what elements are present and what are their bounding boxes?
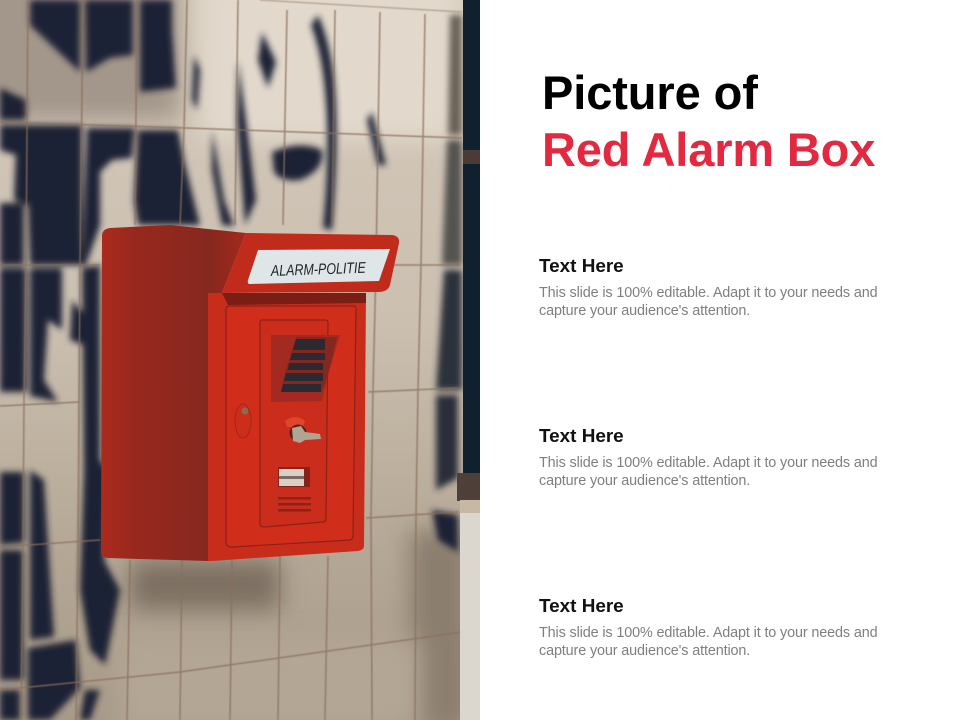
text block 3 (539, 596, 877, 658)
title line 2: Red Alarm Box (542, 123, 875, 176)
graffiti (0, 0, 386, 720)
vent hood (271, 335, 340, 402)
text block 3: Text Here (539, 596, 624, 617)
photo: red alarm box on graffiti tile wall (0, 0, 480, 720)
lower slots (278, 497, 311, 512)
alarm box (101, 225, 399, 561)
label plate (248, 249, 390, 284)
door (226, 306, 356, 547)
text block 1: This slide is 100% editable. Adapt it to your needs and (539, 284, 877, 300)
title line 1: Picture of (542, 66, 758, 119)
title (542, 66, 875, 176)
latch (235, 404, 251, 438)
box front (208, 293, 366, 561)
hood (222, 233, 399, 293)
label text: ALARM-POLITIE (270, 260, 367, 280)
text block 3: capture your audience's attention. (539, 642, 750, 658)
handle (285, 417, 321, 443)
graffiti right edge (432, 15, 462, 552)
text block 3: This slide is 100% editable. Adapt it to your needs and (539, 624, 877, 640)
text block 1: capture your audience's attention. (539, 302, 750, 318)
text block 2 (539, 426, 877, 488)
text block 2: This slide is 100% editable. Adapt it to your needs and (539, 454, 877, 470)
shadow below hood (222, 293, 366, 305)
box side (101, 225, 246, 561)
tile grout lines (0, 0, 462, 720)
text block 1 (539, 256, 877, 318)
text block 2: Text Here (539, 426, 624, 447)
text block 2: capture your audience's attention. (539, 472, 750, 488)
indicator window (278, 467, 310, 487)
wall background (0, 0, 480, 720)
text block 1: Text Here (539, 256, 624, 277)
dark right strip (457, 0, 480, 720)
inner panel (260, 320, 328, 527)
vent slots (281, 337, 337, 392)
